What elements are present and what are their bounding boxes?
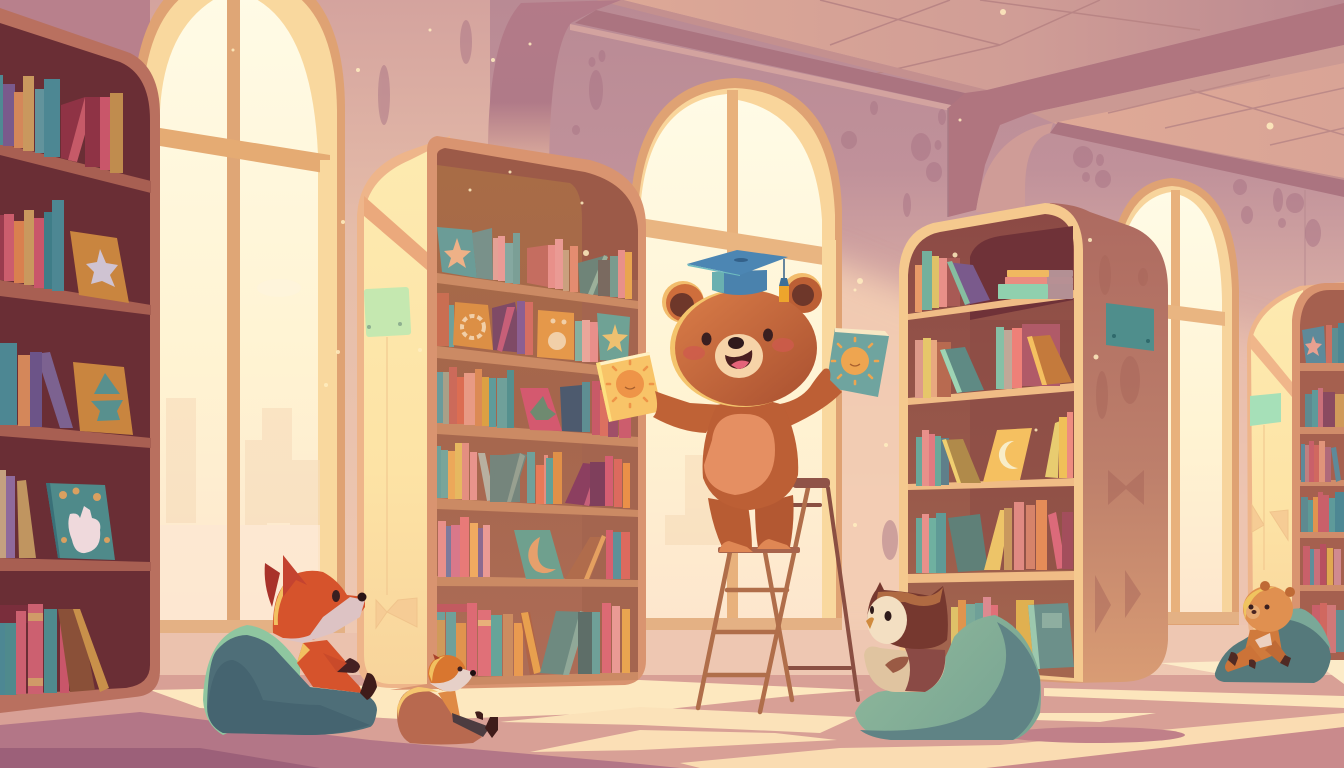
head	[670, 289, 816, 407]
floor	[0, 658, 1344, 768]
small beanbag	[397, 687, 482, 744]
books row 1	[437, 227, 632, 299]
book held left	[596, 352, 662, 422]
window centre	[630, 78, 842, 630]
owl	[864, 582, 948, 692]
books right row 4	[916, 500, 1073, 573]
beanbag far right	[1215, 608, 1331, 683]
face	[683, 328, 794, 378]
graduation cap	[687, 250, 789, 302]
window left	[133, 0, 345, 640]
beanbag fox	[203, 625, 377, 735]
small fox	[428, 654, 498, 738]
books right row 2	[915, 324, 1072, 398]
bookshelf far right	[1247, 282, 1344, 660]
star book	[70, 231, 129, 303]
books row 5	[438, 517, 630, 579]
window right	[1107, 178, 1239, 625]
books row 2	[437, 293, 630, 362]
dust motes	[232, 9, 1274, 527]
bunny book	[46, 483, 115, 560]
label plate right	[1106, 303, 1154, 351]
bookshelf right	[899, 203, 1168, 683]
books shelf 5	[0, 604, 109, 695]
wall spots	[378, 20, 1321, 560]
book held right	[826, 328, 889, 397]
books row 3	[437, 367, 631, 438]
books shelf 1	[0, 75, 123, 173]
arms	[653, 391, 722, 433]
books shelf 3	[0, 343, 133, 435]
label plate far right	[1250, 393, 1281, 426]
shelf boards far right	[1300, 363, 1344, 591]
lower wall	[133, 625, 1255, 683]
books shelf 2	[0, 200, 129, 303]
bookshelf left	[0, 8, 160, 713]
books right row 5	[951, 597, 1074, 669]
small bear far right	[1225, 581, 1295, 672]
upper wall arches	[488, 0, 1305, 300]
fox	[265, 555, 377, 700]
shelf boards left	[0, 143, 151, 571]
wood motifs on side	[1095, 255, 1148, 633]
soft light rays on wall	[500, 190, 1344, 640]
legs	[708, 498, 752, 550]
ceiling and beams	[570, 0, 1344, 217]
books row 6	[437, 603, 630, 677]
body	[703, 400, 798, 510]
books shelf 4	[0, 470, 115, 560]
city silhouette through window	[166, 279, 320, 525]
bear	[596, 250, 889, 552]
label plate	[364, 287, 411, 337]
books row 4	[437, 443, 630, 508]
books right row 1	[915, 251, 1073, 312]
beanbag owl	[855, 615, 1041, 740]
triangle book	[73, 362, 133, 435]
bookshelf centre	[357, 136, 646, 690]
ears	[662, 281, 704, 323]
distant buildings	[665, 455, 720, 545]
books right row 3	[916, 412, 1073, 486]
left wall section	[0, 0, 490, 680]
shelf boards centre	[437, 273, 638, 686]
ladder	[698, 478, 858, 712]
books far right	[1301, 323, 1344, 653]
shelf boards right	[908, 290, 1074, 583]
